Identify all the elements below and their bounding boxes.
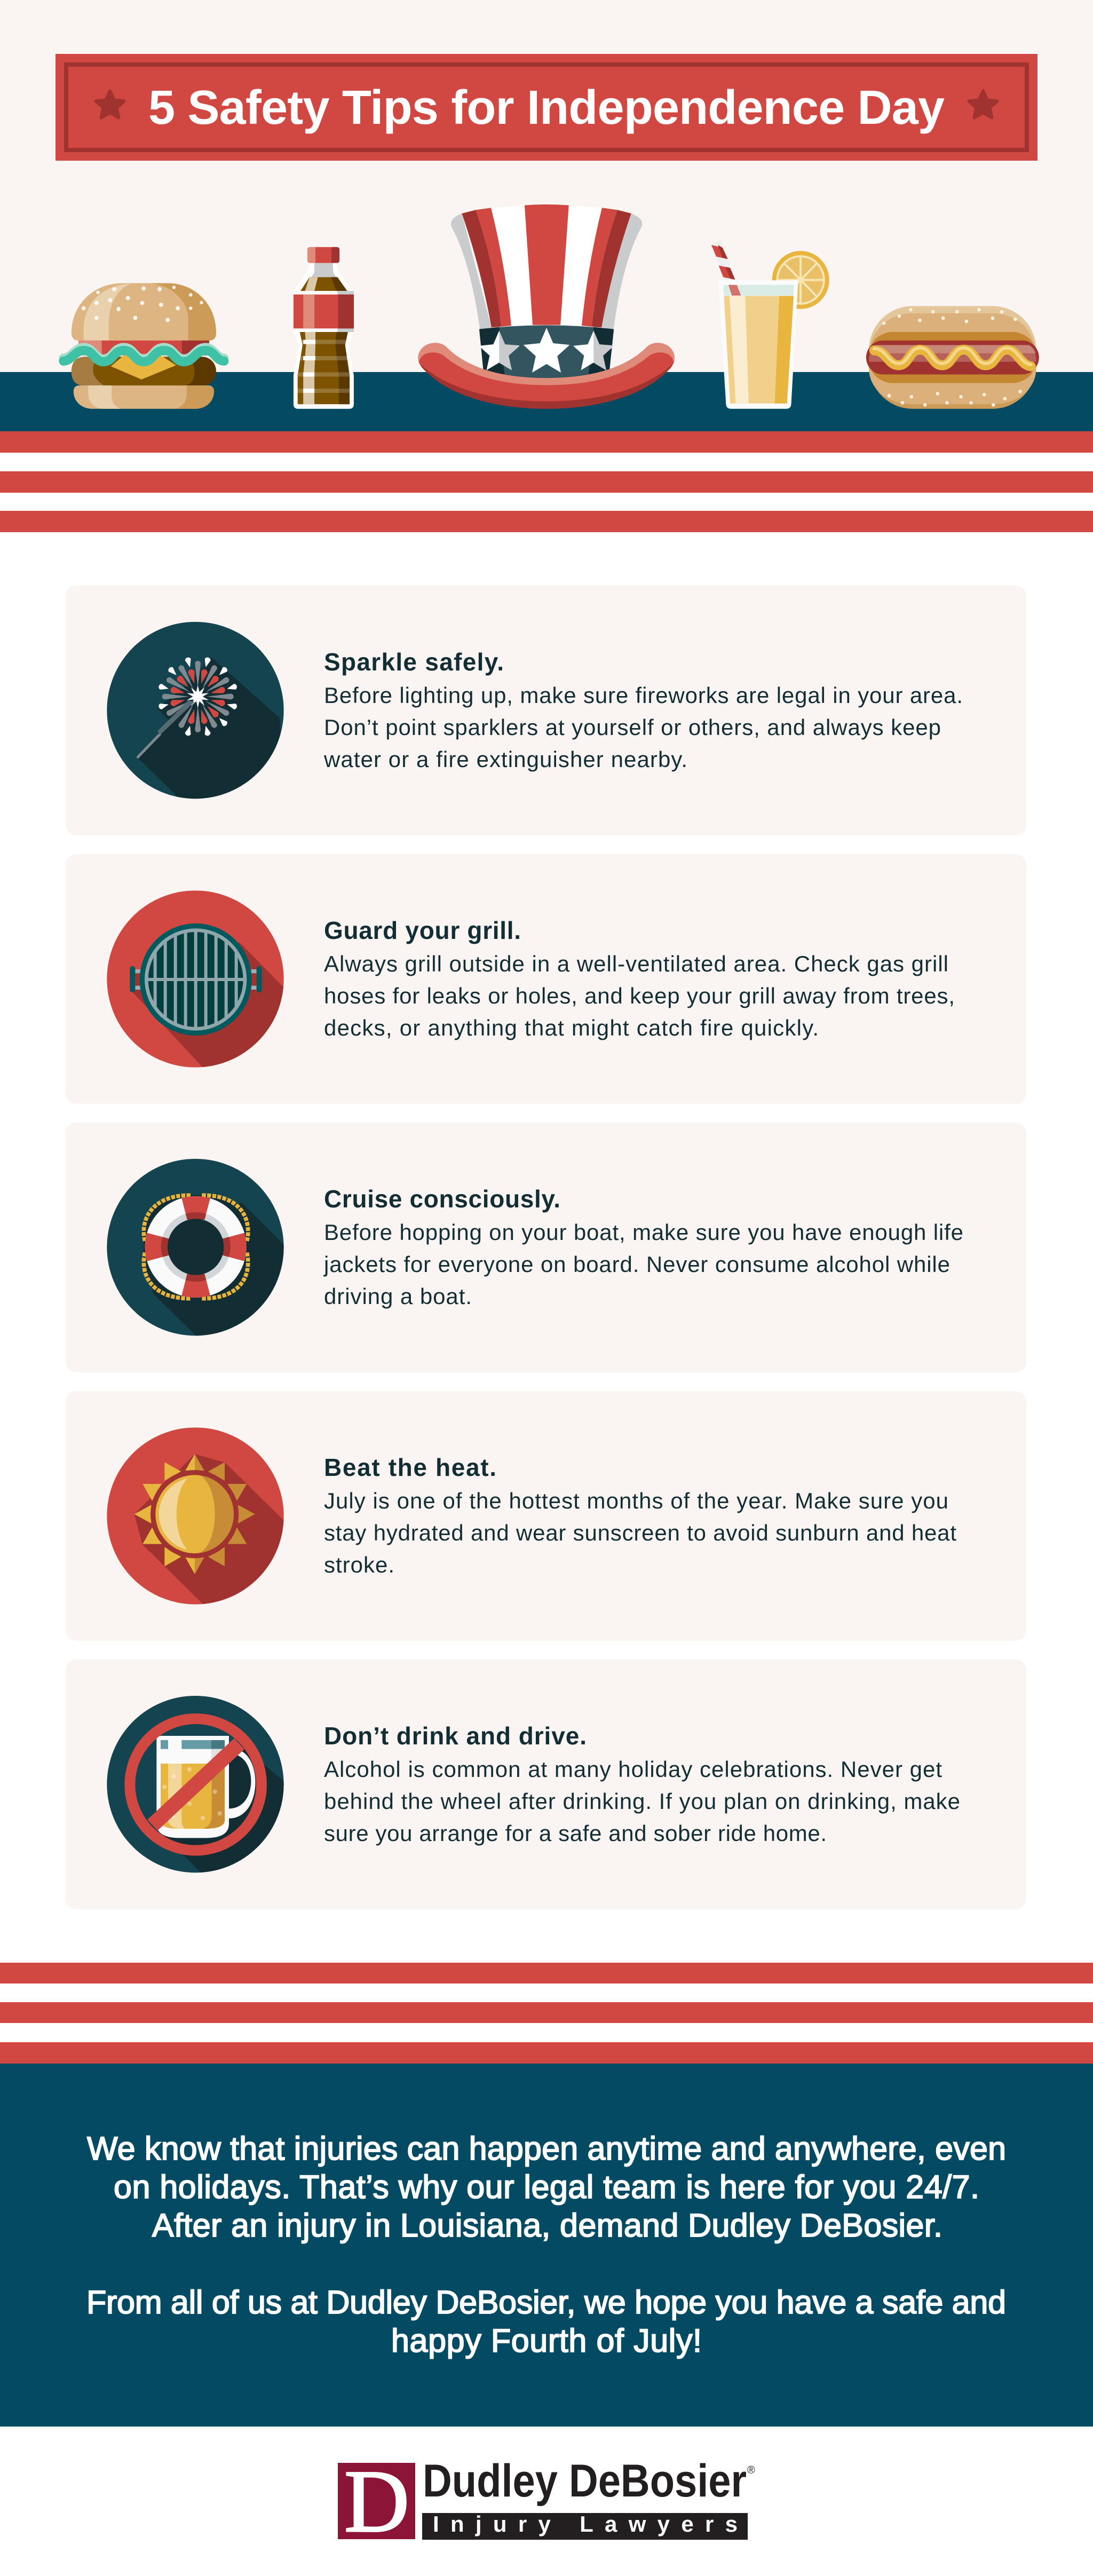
icon: life ring xyxy=(107,1159,284,1336)
panel: sparkle safely xyxy=(66,586,1026,835)
panel: cruise consciously xyxy=(66,1123,1026,1372)
icon: no beer xyxy=(107,1696,284,1872)
closing text: on holidays. That’s why our legal team is here for you 24/7. xyxy=(114,2169,979,2205)
heading and body text: water or a fire extinguisher nearby. xyxy=(323,747,687,772)
top red stripes xyxy=(0,431,1093,532)
heading and body text xyxy=(324,1453,956,1577)
heading and body text: Guard your grill. xyxy=(324,916,521,944)
heading and body text: behind the wheel after drinking. If you plan on drinking, make xyxy=(324,1789,960,1814)
logo: Dudley DeBosier: ® xyxy=(747,2464,755,2476)
heading and body text: Cruise consciously. xyxy=(324,1185,560,1213)
heading and body text: stay hydrated and wear sunscreen to avoid sunburn and heat xyxy=(324,1520,956,1545)
heading and body text: hoses for leaks or holes, and keep your grill away from trees, xyxy=(324,983,955,1008)
icon: sun xyxy=(107,1427,284,1605)
logo: Dudley DeBosier: Injury Lawyers xyxy=(433,2511,738,2537)
heading and body text: decks, or anything that might catch fire quickly. xyxy=(324,1015,819,1040)
panel: beat the heat xyxy=(66,1391,1026,1641)
illustration: soda bottle xyxy=(294,247,354,409)
closing text xyxy=(86,2130,1006,2359)
icon: sparkler xyxy=(107,622,284,808)
heading and body text: jackets for everyone on board. Never consume alcohol while xyxy=(323,1252,950,1277)
heading and body text: Don’t drink and drive. xyxy=(324,1722,587,1750)
logo: Dudley DeBosier: Dudley DeBosier xyxy=(423,2455,747,2507)
heading and body text: Alcohol is common at many holiday celebrations. Never get xyxy=(324,1757,942,1782)
title text: 5 Safety Tips for Independence Day xyxy=(148,81,945,135)
illustration: uncle sam hat xyxy=(418,204,675,409)
heading and body text xyxy=(324,1722,960,1846)
heading and body text: Sparkle safely. xyxy=(324,648,504,676)
illustration: hot dog xyxy=(866,306,1039,409)
heading and body text xyxy=(323,1185,963,1309)
heading and body text: Beat the heat. xyxy=(324,1453,496,1481)
heading and body text: driving a boat. xyxy=(324,1284,472,1309)
heading and body text xyxy=(324,916,955,1040)
closing text: happy Fourth of July! xyxy=(391,2322,702,2359)
closing text: We know that injuries can happen anytime and anywhere, even xyxy=(87,2130,1006,2167)
logo: Dudley DeBosier xyxy=(338,2452,755,2551)
heading and body text: stroke. xyxy=(324,1552,394,1577)
heading and body text: Always grill outside in a well-ventilated area. Check gas grill xyxy=(324,951,948,976)
panel: guard your grill xyxy=(66,854,1026,1104)
navy table band xyxy=(0,372,1093,431)
illustration: lemonade glass xyxy=(711,240,829,409)
closing text: After an injury in Louisiana, demand Dudley DeBosier. xyxy=(152,2207,942,2243)
heading and body text xyxy=(323,648,963,772)
logo: Dudley DeBosier: D xyxy=(344,2452,409,2551)
heading and body text: Before lighting up, make sure fireworks are legal in your area. xyxy=(324,683,963,708)
icon: left star xyxy=(96,91,124,118)
icon: right star xyxy=(969,91,997,118)
heading and body text: sure you arrange for a safe and sober ride home. xyxy=(324,1821,827,1846)
heading and body text: Before hopping on your boat, make sure you have enough life xyxy=(324,1220,963,1245)
heading and body text: Don’t point sparklers at yourself or others, and always keep xyxy=(324,715,941,740)
panel: don't drink and drive xyxy=(66,1660,1026,1909)
illustration: burger xyxy=(64,283,224,409)
title banner xyxy=(56,54,1037,161)
icon: grill xyxy=(107,890,284,1068)
panel: closing message xyxy=(0,2064,1093,2427)
heading and body text: July is one of the hottest months of the year. Make sure you xyxy=(324,1488,948,1513)
bottom red stripes xyxy=(0,1963,1093,2064)
closing text: From all of us at Dudley DeBosier, we hope you have a safe and xyxy=(86,2284,1006,2320)
top cream background xyxy=(0,0,1093,372)
